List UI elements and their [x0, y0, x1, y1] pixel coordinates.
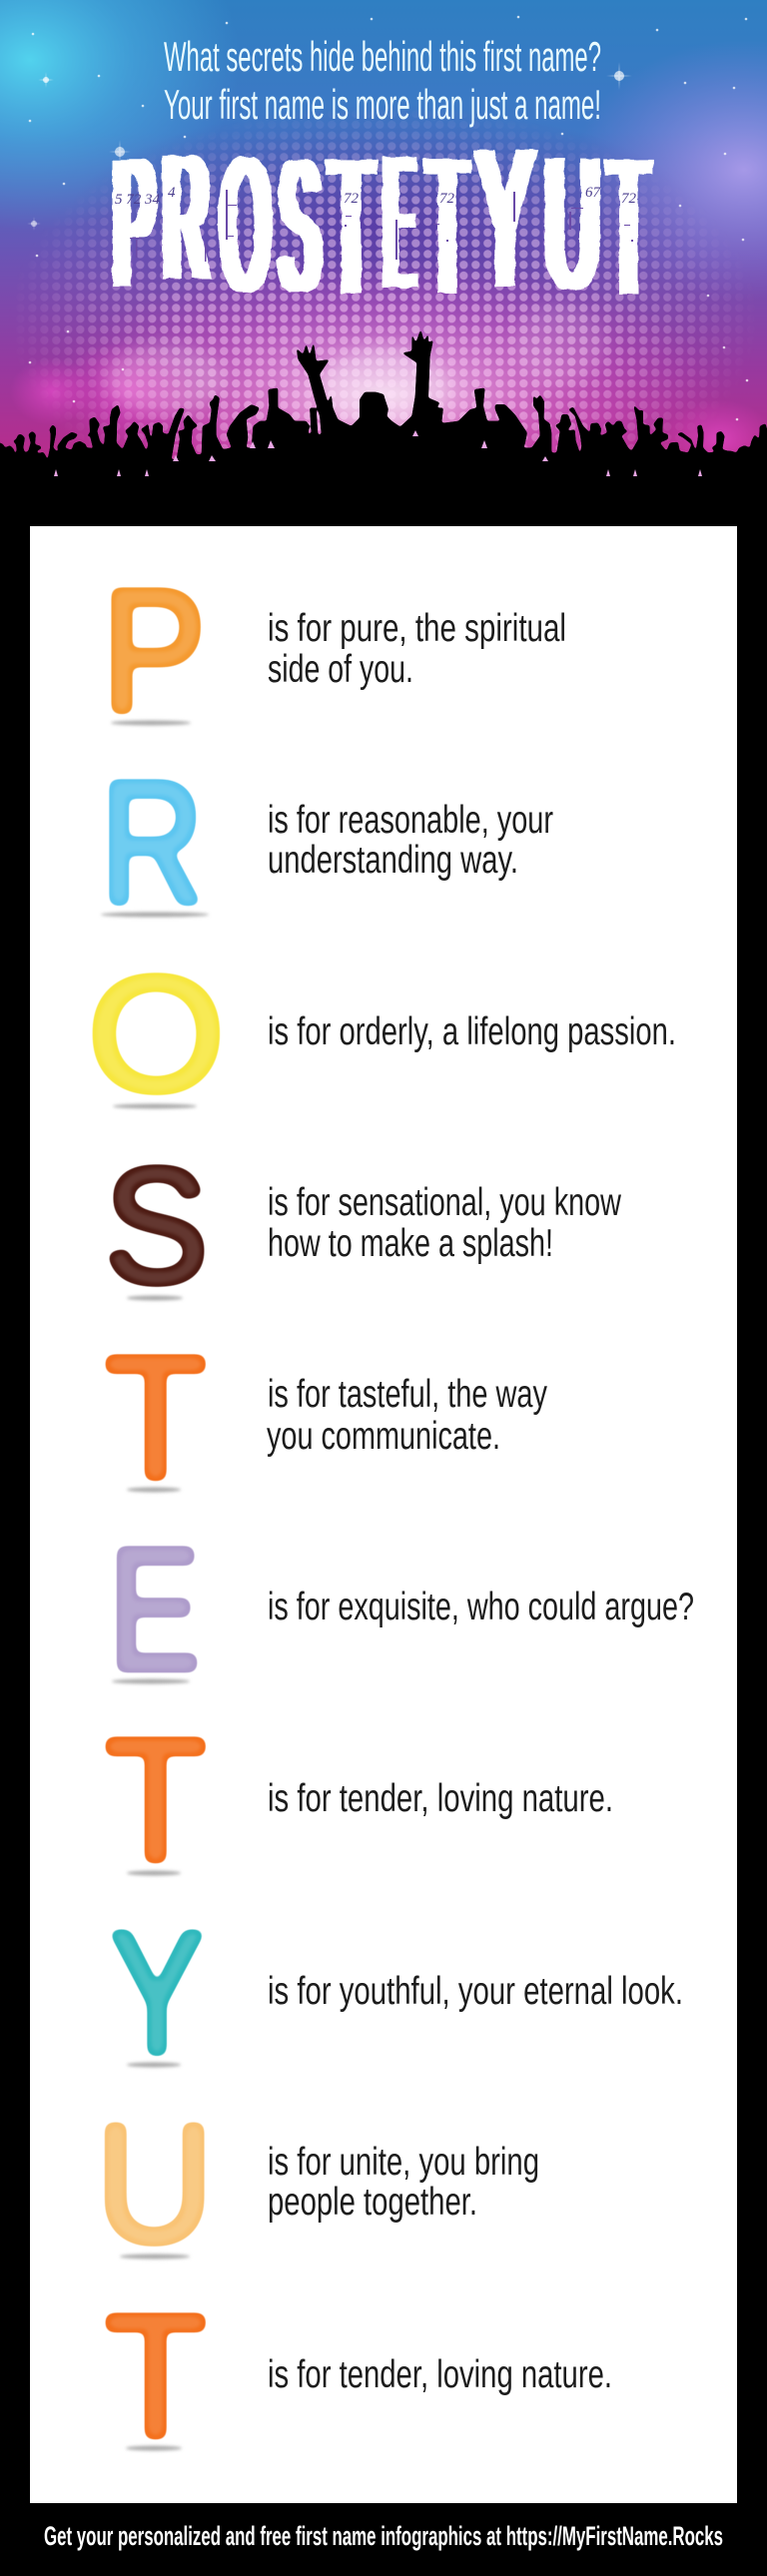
icon: letter Y: Y [110, 1895, 204, 2091]
title: name: 4 [168, 185, 176, 201]
text: T meaning [267, 1373, 547, 1458]
text: U meaning: people together. [268, 2181, 477, 2224]
text: T meaning: is for tender, loving nature. [268, 2353, 612, 2396]
panel: white letters panel [30, 526, 737, 2503]
text: R meaning [268, 799, 553, 882]
row: letter O [88, 943, 676, 1126]
icon: letter S: S [104, 1133, 208, 1317]
icon: letter T: T [105, 2278, 207, 2474]
text: S meaning: how to make a splash! [268, 1222, 553, 1265]
text: P meaning: is for pure, the spiritual [268, 607, 566, 650]
title: name: U [545, 119, 599, 328]
title: name: S [280, 121, 320, 330]
title: name: R [164, 118, 208, 318]
row: letter R [101, 745, 553, 940]
title: name: P [114, 120, 155, 326]
title: name: 72 [621, 191, 637, 207]
title: name: Y [477, 108, 533, 329]
text: U meaning: is for unite, you bring [268, 2141, 539, 2184]
text: P meaning [268, 607, 566, 691]
title: name [114, 108, 648, 335]
row: letter T [105, 2278, 612, 2474]
row: letter Y [110, 1895, 683, 2091]
crowd silhouette [0, 328, 767, 532]
icon: letter O: O [88, 943, 225, 1126]
icon: letter R: R [101, 745, 203, 940]
text: P meaning: side of you. [268, 648, 413, 691]
title: name: 72 [344, 191, 360, 207]
header: concert background [0, 0, 767, 459]
icon: letter E: E [109, 1513, 200, 1707]
title: name: 72 [439, 191, 455, 207]
title: name: T [330, 119, 374, 335]
icon: letter P: P [102, 554, 206, 749]
title: name: E [385, 117, 413, 328]
icon: letter U: U [96, 2090, 214, 2278]
title: name: T [609, 117, 648, 335]
row: letter P [102, 554, 566, 749]
title: name: T [428, 116, 466, 335]
title: name: 5 72 34 [115, 192, 160, 208]
row: letter E [109, 1513, 694, 1707]
row: letter S [104, 1133, 622, 1317]
text: S meaning: is for sensational, you know [268, 1181, 622, 1224]
text: S meaning [268, 1181, 622, 1265]
crowd gaps between figures [54, 430, 702, 476]
icon: letter T: T [105, 1702, 207, 1898]
text: T meaning: is for tender, loving nature. [268, 1777, 613, 1820]
text: T meaning: is for tasteful, the way [268, 1373, 547, 1416]
text: R meaning: understanding way. [268, 839, 518, 882]
row: letter U [96, 2090, 539, 2278]
row: letter T [105, 1320, 547, 1516]
text: U meaning [268, 2141, 539, 2224]
row: letter T [105, 1702, 613, 1898]
title: name: 67 [585, 185, 601, 201]
title: name: O [222, 119, 270, 332]
text: T meaning: you communicate. [267, 1415, 500, 1458]
icon: letter T: T [105, 1320, 207, 1516]
text: R meaning: is for reasonable, your [268, 799, 553, 842]
